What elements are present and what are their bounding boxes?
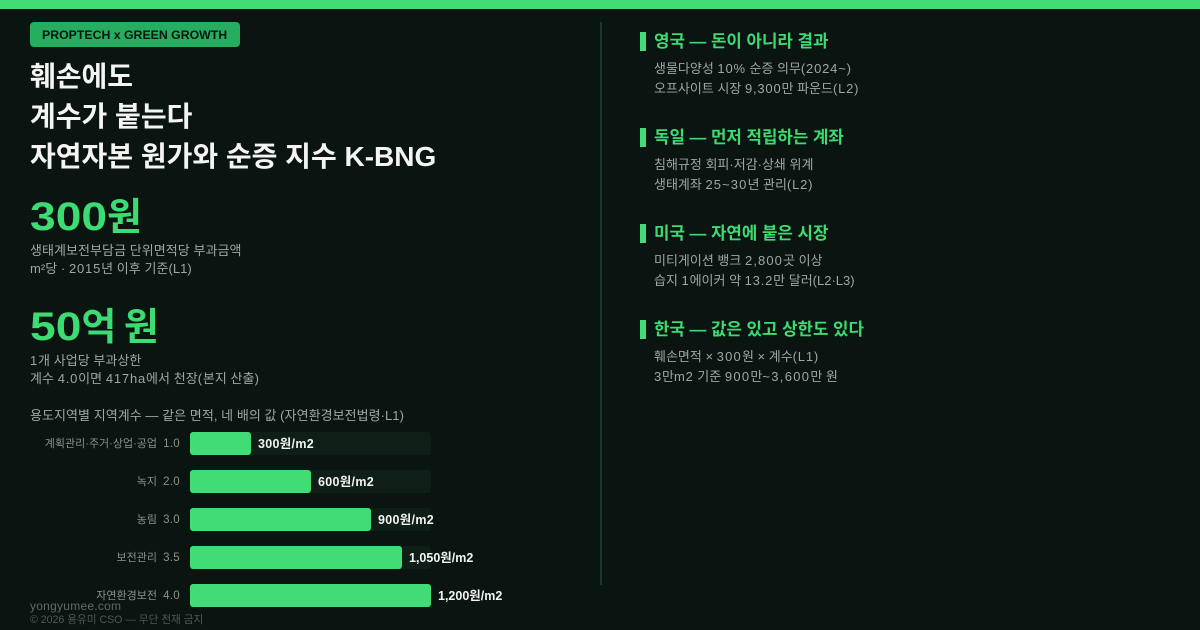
panel: UK	[640, 32, 859, 96]
column divider	[600, 22, 602, 585]
row: 1.0	[45, 432, 431, 455]
badge	[30, 22, 240, 47]
row: 1.0: 300원/m2	[258, 437, 314, 451]
panel: Korea: 한국 — 값은 있고 상한도 있다	[654, 320, 864, 339]
panel: Korea: 훼손면적 × 300원 × 계수(L1)	[654, 349, 819, 364]
row: 3.0	[137, 508, 434, 531]
panel: Germany: 생태계좌 25~30년 관리(L2)	[654, 177, 813, 192]
badge: PROPTECH x GREEN GROWTH	[42, 28, 227, 42]
footer: copyright: © 2026 용유미 CSO — 무단 전재 금지	[30, 614, 203, 626]
row: 3.5	[117, 546, 473, 569]
stat description: 50억 원: 계수 4.0이면 417ha에서 천장(본지 산출)	[30, 371, 260, 386]
footer: site: yongyumee.com	[30, 599, 121, 613]
row: 2.0: 녹지 2.0	[137, 476, 180, 488]
stat: 50억 원: 50	[30, 305, 81, 349]
row: 4.0: 1,200원/m2	[438, 589, 502, 603]
row: 4.0	[96, 584, 502, 607]
title: 훼손에도	[30, 61, 133, 92]
stat description: 50억 원	[30, 353, 260, 386]
panel: UK: 오프사이트 시장 9,300만 파운드(L2)	[654, 81, 859, 96]
panel: UK: 생물다양성 10% 순증 의무(2024~)	[654, 61, 852, 76]
row: 3.0: 900원/m2	[378, 513, 434, 527]
stat: 300원	[30, 195, 142, 239]
panel: UK: 영국 — 돈이 아니라 결과	[654, 32, 828, 51]
stat: 50억 원	[30, 305, 159, 349]
stat description: 50억 원: 1개 사업당 부과상한	[30, 353, 141, 368]
row: 3.5: 1,050원/m2	[409, 551, 473, 565]
row: 3.0: 농림 3.0	[137, 514, 180, 526]
panel: USA: 습지 1에이커 약 13.2만 달러(L2·L3)	[654, 273, 855, 288]
stat description: 300원: 생태계보전부담금 단위면적당 부과금액	[30, 243, 242, 258]
stat description: 300원: m²당 · 2015년 이후 기준(L1)	[30, 261, 192, 276]
title	[30, 61, 436, 172]
row: 1.0: 계획관리·주거·상업·공업 1.0	[45, 438, 180, 450]
panel: USA	[640, 224, 855, 288]
title: 계수가 붙는다	[30, 101, 192, 132]
top accent bar	[0, 0, 1200, 9]
panel: Germany: 침해규정 회피·저감·상쇄 위계	[654, 157, 813, 172]
title: 자연자본 원가와 순증 지수 K-BNG	[30, 141, 436, 172]
stat: 300원: 300	[30, 195, 107, 239]
panel: Germany: 독일 — 먼저 적립하는 계좌	[654, 128, 844, 147]
panel: Korea: 3만m2 기준 900만~3,600만 원	[654, 369, 838, 384]
panel: Germany	[640, 128, 844, 192]
panel: USA: 미국 — 자연에 붙은 시장	[654, 224, 828, 243]
row: 4.0: 자연환경보전 4.0	[96, 590, 180, 602]
stat: 50억 원: 억 원	[81, 307, 159, 349]
panel: Korea	[640, 320, 864, 384]
chart heading: 용도지역별 지역계수 — 같은 면적, 네 배의 값 (자연환경보전법령·L1)	[30, 408, 404, 423]
row: 3.5: 보전관리 3.5	[117, 552, 180, 564]
row: 2.0	[137, 470, 431, 493]
stat description: 300원	[30, 243, 242, 276]
bar chart	[45, 432, 502, 607]
row: 2.0: 600원/m2	[318, 475, 374, 489]
panel: USA: 미티게이션 뱅크 2,800곳 이상	[654, 253, 822, 268]
stat: 300원: 원	[107, 197, 142, 239]
